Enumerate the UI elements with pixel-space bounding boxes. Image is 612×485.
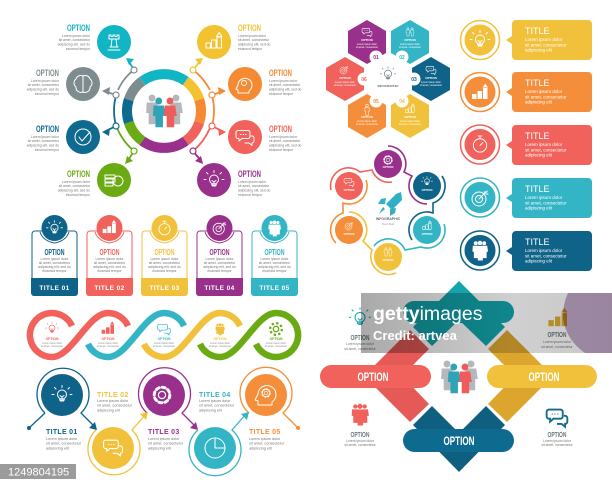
wave ribbons — [30, 313, 298, 357]
callout descriptions: sit amet, consectetur — [525, 254, 567, 258]
stock image id badge — [0, 464, 76, 479]
hexagon labels: OPTION — [339, 76, 351, 80]
option descriptions: Lorem ipsum dolor — [31, 79, 60, 83]
panel: diamond options — [320, 281, 597, 472]
option descriptions: eiusmod tempor — [35, 92, 60, 96]
timeline descriptions: sit amet, consectetur — [249, 442, 285, 446]
option descriptions: Lorem ipsum dolor — [238, 34, 267, 38]
callout titles: TITLE — [525, 237, 550, 247]
option descriptions: adipiscing elit, sed do — [58, 188, 90, 192]
timeline rings and connectors — [29, 367, 298, 476]
callout descriptions: Lorem ipsum dolor — [525, 142, 563, 147]
callout titles — [525, 26, 550, 247]
diamond option descriptions — [344, 340, 574, 447]
panel: infinity wave: sit amet, consectetur — [97, 345, 119, 348]
option descriptions: eiusmod tempor — [66, 193, 91, 197]
wave labels: OPTION — [102, 337, 115, 341]
icon: people in ring — [146, 95, 183, 127]
diamond option descriptions: sit amet, consectetur — [541, 345, 574, 349]
card descriptions: adipiscing elit, sed do — [203, 265, 236, 269]
timeline end dots — [27, 426, 31, 430]
card descriptions: eiusmod tempor — [207, 269, 233, 273]
callout descriptions: sit amet, consectetur — [525, 148, 567, 152]
card descriptions — [38, 257, 291, 273]
callout descriptions: Lorem ipsum dolor — [525, 195, 563, 200]
diamond option descriptions: Lorem ipsum dolor — [346, 342, 375, 346]
diamond option labels: OPTION — [350, 335, 370, 342]
callout descriptions: adipiscing elit — [525, 152, 553, 158]
callout descriptions: adipiscing elit — [525, 100, 553, 104]
timeline descriptions — [46, 399, 285, 450]
card descriptions: adipiscing elit, sed do — [93, 265, 126, 269]
callout descriptions: adipiscing elit — [525, 206, 553, 210]
card titles — [39, 285, 290, 292]
option descriptions: Lorem ipsum dolor — [62, 180, 91, 184]
timeline arrowheads — [89, 422, 97, 430]
wave labels: OPTION — [214, 337, 227, 341]
timeline descriptions: adipiscing elit — [46, 446, 70, 450]
timeline descriptions: sit amet, consectetur — [97, 404, 133, 408]
card headings: OPTION — [264, 248, 285, 257]
hexagon numbers: 03 — [411, 77, 417, 83]
card descriptions: eiusmod tempor — [152, 269, 178, 273]
panel: infinity wave: Lorem ipsum dolor — [154, 342, 174, 345]
wave labels — [46, 337, 283, 341]
card descriptions: Lorem ipsum dolor — [260, 257, 289, 261]
timeline descriptions: Lorem ipsum dolor — [249, 437, 281, 441]
card descriptions: adipiscing elit, sed do — [258, 265, 291, 269]
callout titles: TITLE — [525, 184, 550, 194]
panel: infinity wave: Lorem ipsum dolor — [210, 342, 230, 345]
timeline descriptions: adipiscing elit — [199, 408, 223, 412]
icon: team — [352, 404, 369, 426]
callout descriptions: sit amet, consectetur — [525, 94, 567, 100]
option descriptions: eiusmod tempor — [269, 92, 294, 96]
hexagon numbers — [358, 50, 420, 108]
panel: title cards — [31, 215, 298, 296]
option labels: OPTION — [36, 68, 59, 78]
chain labels: OPTION — [422, 188, 432, 192]
diamond pill labels: OPTION — [528, 370, 560, 384]
option labels — [36, 23, 292, 179]
callout descriptions: Lorem ipsum dolor — [525, 248, 563, 253]
panel: hexagon cluster: Lorem ipsum dolor — [335, 81, 355, 84]
card headings: OPTION — [154, 248, 175, 257]
connectors left — [104, 60, 224, 162]
option labels: OPTION — [269, 68, 292, 78]
panel: infinity wave: sit amet, consectetur — [41, 345, 63, 348]
hexagon labels: OPTION — [425, 76, 437, 80]
panel: hexagon cluster: sit amet, consectetur — [420, 84, 442, 87]
wave icons — [46, 322, 58, 332]
card circles — [42, 215, 68, 241]
diamond option labels: OPTION — [548, 432, 566, 439]
panel: infinity wave: sit amet, consectetur — [153, 345, 175, 348]
option descriptions: sit amet, consectetur — [269, 139, 301, 143]
card descriptions: Lorem ipsum dolor — [150, 257, 179, 261]
chain labels: OPTION — [344, 188, 354, 192]
option descriptions: adipiscing elit, sed do — [27, 144, 59, 148]
callout descriptions: adipiscing elit — [525, 48, 553, 52]
option descriptions: adipiscing elit, sed do — [238, 42, 271, 46]
panel: hexagon cluster: sit amet, consectetur — [399, 46, 421, 49]
option descriptions: Lorem ipsum dolor — [269, 79, 298, 83]
card title bands — [31, 278, 78, 296]
callout icons — [470, 30, 490, 206]
chain labels — [344, 165, 432, 262]
card descriptions: Lorem ipsum dolor — [95, 257, 124, 261]
card headings: OPTION — [44, 248, 65, 257]
panel: hexagon cluster: sit amet, consectetur — [356, 123, 378, 126]
chain labels: OPTION — [383, 165, 393, 169]
timeline descriptions: sit amet, consectetur — [148, 442, 184, 446]
icon: rocket — [378, 192, 402, 216]
chain centre caption — [376, 217, 401, 226]
wave labels: OPTION — [158, 337, 171, 341]
option labels: OPTION — [36, 124, 59, 134]
connector nodes and arrowheads — [113, 67, 215, 154]
diamond pill labels — [358, 370, 560, 448]
timeline titles: TITLE 02 — [97, 392, 129, 399]
card descriptions: sit amet, consectetur — [204, 261, 236, 265]
option circles — [97, 25, 131, 59]
option descriptions: adipiscing elit, sed do — [269, 144, 302, 148]
panel: bottom title timeline — [27, 367, 300, 476]
diamond option labels — [350, 332, 566, 439]
option descriptions: Lorem ipsum dolor — [269, 135, 298, 139]
hexagon labels: OPTION — [404, 115, 416, 119]
card descriptions: eiusmod tempor — [42, 269, 68, 273]
hexagon icons — [340, 27, 436, 115]
option labels: OPTION — [67, 23, 90, 33]
option labels: OPTION — [269, 124, 292, 134]
icon: bulb — [349, 307, 371, 324]
callout titles: TITLE — [525, 26, 550, 36]
diamond option descriptions: Lorem ipsum dolor — [543, 439, 572, 443]
option descriptions: sit amet, consectetur — [59, 184, 91, 188]
option descriptions: eiusmod tempor — [238, 47, 263, 51]
card descriptions: eiusmod tempor — [262, 269, 288, 273]
option descriptions: Lorem ipsum dolor — [62, 34, 91, 38]
callout rings — [460, 20, 500, 270]
diamond pill labels: OPTION — [444, 434, 474, 448]
panel: hexagon cluster: Lorem ipsum dolor — [421, 81, 441, 84]
card titles: TITLE 04 — [204, 285, 235, 292]
icon: bars — [548, 308, 568, 326]
card descriptions: Lorem ipsum dolor — [205, 257, 234, 261]
card descriptions: sit amet, consectetur — [94, 261, 126, 265]
hexagon numbers: 04 — [399, 99, 405, 105]
hexagon labels: OPTION — [361, 38, 373, 42]
chain circles — [374, 150, 402, 178]
chain arcs and connectors — [331, 146, 445, 275]
timeline titles: TITLE 05 — [249, 429, 281, 436]
card titles: TITLE 01 — [39, 285, 70, 292]
timeline descriptions: Lorem ipsum dolor — [199, 399, 231, 403]
panel: hexagon cluster: sit amet, consectetur — [334, 84, 356, 87]
panel: hexagon cluster: Lorem ipsum dolor — [357, 120, 377, 123]
diamond option labels: OPTION — [350, 432, 370, 439]
hexagon labels: OPTION — [404, 38, 416, 42]
panel: title callouts — [460, 20, 592, 271]
card descriptions: sit amet, consectetur — [149, 261, 181, 265]
panel: hexagon cluster: sit amet, consectetur — [399, 123, 421, 126]
card descriptions: eiusmod tempor — [97, 269, 123, 273]
stock image id badge: 1249804195 — [8, 466, 69, 478]
diamond option descriptions: sit amet, consectetur — [541, 443, 574, 447]
panel: hexagon cluster: sit amet, consectetur — [356, 46, 378, 49]
timeline titles: TITLE 01 — [46, 429, 78, 436]
callout descriptions: Lorem ipsum dolor — [525, 89, 563, 94]
diamond chevrons — [413, 281, 505, 346]
timeline descriptions: adipiscing elit — [97, 408, 121, 412]
timeline titles: TITLE 04 — [199, 392, 231, 399]
wave labels: OPTION — [270, 337, 283, 341]
ring segments — [127, 74, 201, 148]
timeline descriptions: sit amet, consectetur — [46, 442, 82, 446]
panel: hexagon cluster: Lorem ipsum dolor — [400, 43, 420, 46]
card headings — [44, 248, 285, 257]
panel: circular chain — [331, 146, 445, 275]
option descriptions: sit amet, consectetur — [269, 83, 301, 87]
card descriptions: sit amet, consectetur — [259, 261, 291, 265]
diamond option descriptions: sit amet, consectetur — [344, 347, 377, 351]
option labels: OPTION — [67, 169, 90, 179]
timeline descriptions: sit amet, consectetur — [199, 404, 235, 408]
watermark banner: Credit: artvea — [373, 328, 458, 343]
card outlines — [32, 231, 297, 280]
option descriptions: sit amet, consectetur — [28, 83, 60, 87]
option descriptions: adipiscing elit, sed do — [58, 42, 90, 46]
timeline titles — [46, 392, 281, 436]
option descriptions: sit amet, consectetur — [28, 139, 60, 143]
option descriptions: eiusmod tempor — [269, 148, 294, 152]
option descriptions: eiusmod tempor — [238, 193, 263, 197]
option descriptions — [27, 34, 302, 197]
callout descriptions: Lorem ipsum dolor — [525, 37, 563, 42]
callout descriptions: sit amet, consectetur — [525, 42, 567, 48]
card descriptions: adipiscing elit, sed do — [148, 265, 181, 269]
timeline descriptions: Lorem ipsum dolor — [46, 437, 78, 441]
option labels: OPTION — [238, 23, 261, 33]
panel: infinity wave: sit amet, consectetur — [265, 345, 287, 348]
card titles: TITLE 03 — [149, 285, 180, 292]
hexagon numbers: 02 — [399, 55, 405, 61]
diamond pills — [403, 301, 514, 323]
panel: circular option diagram — [27, 23, 302, 197]
option descriptions: Lorem ipsum dolor — [238, 180, 267, 184]
wave labels: OPTION — [46, 337, 59, 341]
option descriptions: Lorem ipsum dolor — [31, 135, 60, 139]
panel: infinity wave: Lorem ipsum dolor — [98, 342, 118, 345]
callout boxes — [506, 20, 592, 60]
callout titles: TITLE — [525, 78, 550, 88]
card titles: TITLE 02 — [94, 285, 125, 292]
panel: hexagon cluster: Lorem ipsum dolor — [400, 120, 420, 123]
panel: hexagon cluster: Lorem ipsum dolor — [357, 43, 377, 46]
option descriptions: adipiscing elit, sed do — [27, 88, 59, 92]
option descriptions: sit amet, consectetur — [238, 38, 270, 42]
option labels: OPTION — [238, 169, 261, 179]
diamond option descriptions: Lorem ipsum dolor — [543, 340, 572, 344]
diamond option descriptions: sit amet, consectetur — [344, 443, 377, 447]
panel: infinity wave: Lorem ipsum dolor — [42, 342, 62, 345]
panel: infinity wave: sit amet, consectetur — [209, 345, 231, 348]
timeline circles — [41, 374, 83, 416]
hexagon numbers: 01 — [373, 55, 379, 61]
icon: central people — [441, 361, 478, 393]
chain centre caption: Your Text — [382, 222, 394, 226]
icon: central bulb — [380, 67, 396, 79]
chain labels: OPTION — [344, 232, 354, 236]
hexagon centre caption: INFOGRAPHIC — [378, 84, 399, 88]
diamond option descriptions: Lorem ipsum dolor — [346, 439, 375, 443]
icon: chat — [547, 410, 567, 427]
timeline descriptions: Lorem ipsum dolor — [97, 399, 129, 403]
card descriptions: adipiscing elit, sed do — [38, 265, 71, 269]
circle icons — [74, 32, 254, 186]
callout descriptions: sit amet, consectetur — [525, 200, 567, 206]
option descriptions: sit amet, consectetur — [238, 184, 270, 188]
chain centre caption: INFOGRAPHIC — [376, 217, 401, 221]
timeline descriptions: Lorem ipsum dolor — [148, 437, 180, 441]
card titles: TITLE 05 — [259, 285, 290, 292]
timeline descriptions: adipiscing elit — [148, 446, 172, 450]
callout descriptions — [525, 37, 567, 264]
panel: infinity wave — [30, 313, 298, 357]
card headings: OPTION — [210, 248, 230, 257]
diamond option labels: OPTION — [548, 332, 566, 339]
panel: infinity wave: Lorem ipsum dolor — [266, 342, 286, 345]
panel: hexagon cluster — [326, 20, 450, 138]
option descriptions: eiusmod tempor — [35, 148, 60, 152]
option descriptions: eiusmod tempor — [66, 47, 91, 51]
chain labels: OPTION — [383, 258, 393, 262]
watermark banner: gettyimages — [373, 303, 483, 325]
timeline descriptions: adipiscing elit — [249, 446, 273, 450]
option descriptions: sit amet, consectetur — [59, 38, 91, 42]
diamond pill labels: OPTION — [358, 370, 388, 384]
hexagon numbers: 06 — [361, 77, 367, 83]
chain icons — [344, 156, 432, 257]
hexagon labels: OPTION — [361, 115, 373, 119]
watermark banner — [361, 293, 612, 353]
card headings: OPTION — [100, 248, 120, 257]
card descriptions: Lorem ipsum dolor — [40, 257, 69, 261]
timeline titles: TITLE 03 — [148, 429, 180, 436]
card icons — [46, 221, 226, 235]
option descriptions: adipiscing elit, sed do — [238, 188, 271, 192]
card descriptions: sit amet, consectetur — [39, 261, 71, 265]
hexagon labels — [339, 38, 437, 119]
callout titles: TITLE — [525, 131, 550, 141]
callout descriptions: adipiscing elit — [525, 258, 553, 264]
chain labels: OPTION — [422, 232, 432, 236]
option descriptions: adipiscing elit, sed do — [269, 88, 302, 92]
hexagon numbers: 05 — [373, 99, 379, 105]
timeline icons — [52, 386, 276, 458]
